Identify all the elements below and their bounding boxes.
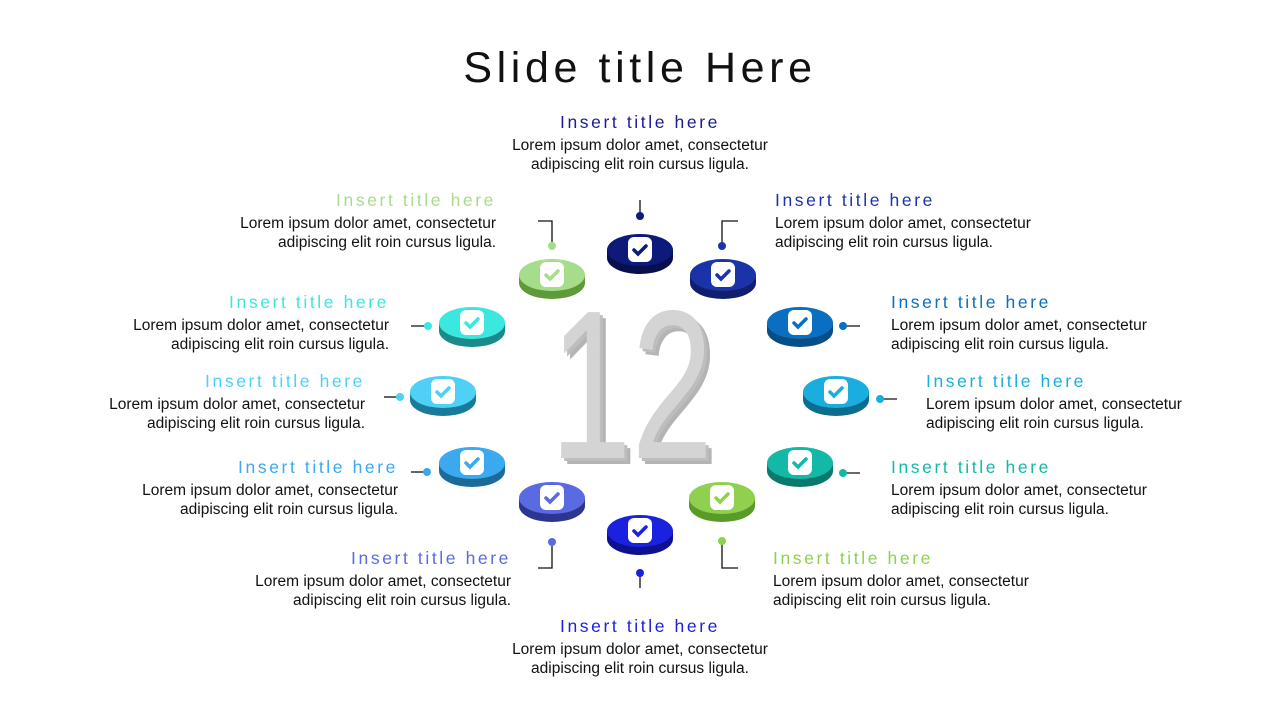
text: left 3: Insert title here (238, 457, 398, 477)
disc 8 (519, 482, 585, 522)
text: right 3: Insert title here (891, 457, 1051, 477)
text: right 2: Insert title here (926, 371, 1086, 391)
text: top: Insert title here (560, 112, 720, 132)
text: left 1: adipiscing elit roin cursus ligula. (171, 336, 389, 353)
text: left 3: Lorem ipsum dolor amet, consectetur (142, 482, 398, 499)
text: right 1: Insert title here (891, 292, 1051, 312)
text: bottom-left: adipiscing elit roin cursus ligula. (293, 592, 511, 609)
disc 10 (410, 376, 476, 416)
text: top-right: Insert title here (775, 190, 935, 210)
disc 7 (607, 515, 673, 555)
disc 9 (439, 447, 505, 487)
text: bottom-right: Lorem ipsum dolor amet, consectetur (773, 573, 1029, 590)
disc 5 (767, 447, 833, 487)
text: top: Lorem ipsum dolor amet, consectetur (512, 137, 768, 154)
text: left 2: Insert title here (205, 371, 365, 391)
text: top-left: Lorem ipsum dolor amet, consectetur (240, 215, 496, 232)
text: left 1: Lorem ipsum dolor amet, consectetur (133, 317, 389, 334)
disc 11 (439, 307, 505, 347)
text: right 3: Lorem ipsum dolor amet, consectetur (891, 482, 1147, 499)
disc 6 (689, 482, 755, 522)
text: top-left: adipiscing elit roin cursus ligula. (278, 234, 496, 251)
title: Slide title Here (463, 44, 817, 92)
text: top (512, 112, 768, 173)
number 12: 12 (550, 266, 713, 503)
text: left 2: adipiscing elit roin cursus ligula. (147, 415, 365, 432)
text: right 3: adipiscing elit roin cursus ligula. (891, 501, 1109, 518)
disc 4 (803, 376, 869, 416)
text: left 3: adipiscing elit roin cursus ligula. (180, 501, 398, 518)
text: bottom-right (773, 548, 1029, 609)
text: left 1 (133, 292, 389, 353)
text: bottom: Insert title here (560, 616, 720, 636)
disc 12 (519, 259, 585, 299)
text: bottom-left (255, 548, 511, 609)
text: bottom: adipiscing elit roin cursus ligula. (531, 660, 749, 677)
text: bottom-left: Insert title here (351, 548, 511, 568)
number 12: 12 (553, 269, 716, 506)
connector dots (396, 212, 884, 577)
number 12: 12 (556, 272, 719, 509)
connectors (384, 200, 897, 588)
text: right 2: Lorem ipsum dolor amet, consectetur (926, 396, 1182, 413)
text: left 2: Lorem ipsum dolor amet, consectetur (109, 396, 365, 413)
text: top-left (240, 190, 496, 251)
text: top-right: adipiscing elit roin cursus ligula. (775, 234, 993, 251)
text: right 1: Lorem ipsum dolor amet, consectetur (891, 317, 1147, 334)
text: bottom-right: adipiscing elit roin cursus ligula. (773, 592, 991, 609)
text: bottom: Lorem ipsum dolor amet, consectetur (512, 641, 768, 658)
text: right 3 (891, 457, 1147, 518)
text: left 1: Insert title here (229, 292, 389, 312)
text: right 2 (926, 371, 1182, 432)
disc 2 (690, 259, 756, 299)
text: right 1: adipiscing elit roin cursus ligula. (891, 336, 1109, 353)
text: top-right (775, 190, 1031, 251)
discs (410, 234, 869, 555)
text: bottom (512, 616, 768, 677)
text: top-right: Lorem ipsum dolor amet, consectetur (775, 215, 1031, 232)
text: left 2 (109, 371, 365, 432)
disc 3 (767, 307, 833, 347)
text: top: adipiscing elit roin cursus ligula. (531, 156, 749, 173)
text: left 3 (142, 457, 398, 518)
text: right 2: adipiscing elit roin cursus ligula. (926, 415, 1144, 432)
text: right 1 (891, 292, 1147, 353)
disc 1 (607, 234, 673, 274)
text: bottom-left: Lorem ipsum dolor amet, consectetur (255, 573, 511, 590)
text: bottom-right: Insert title here (773, 548, 933, 568)
text: top-left: Insert title here (336, 190, 496, 210)
